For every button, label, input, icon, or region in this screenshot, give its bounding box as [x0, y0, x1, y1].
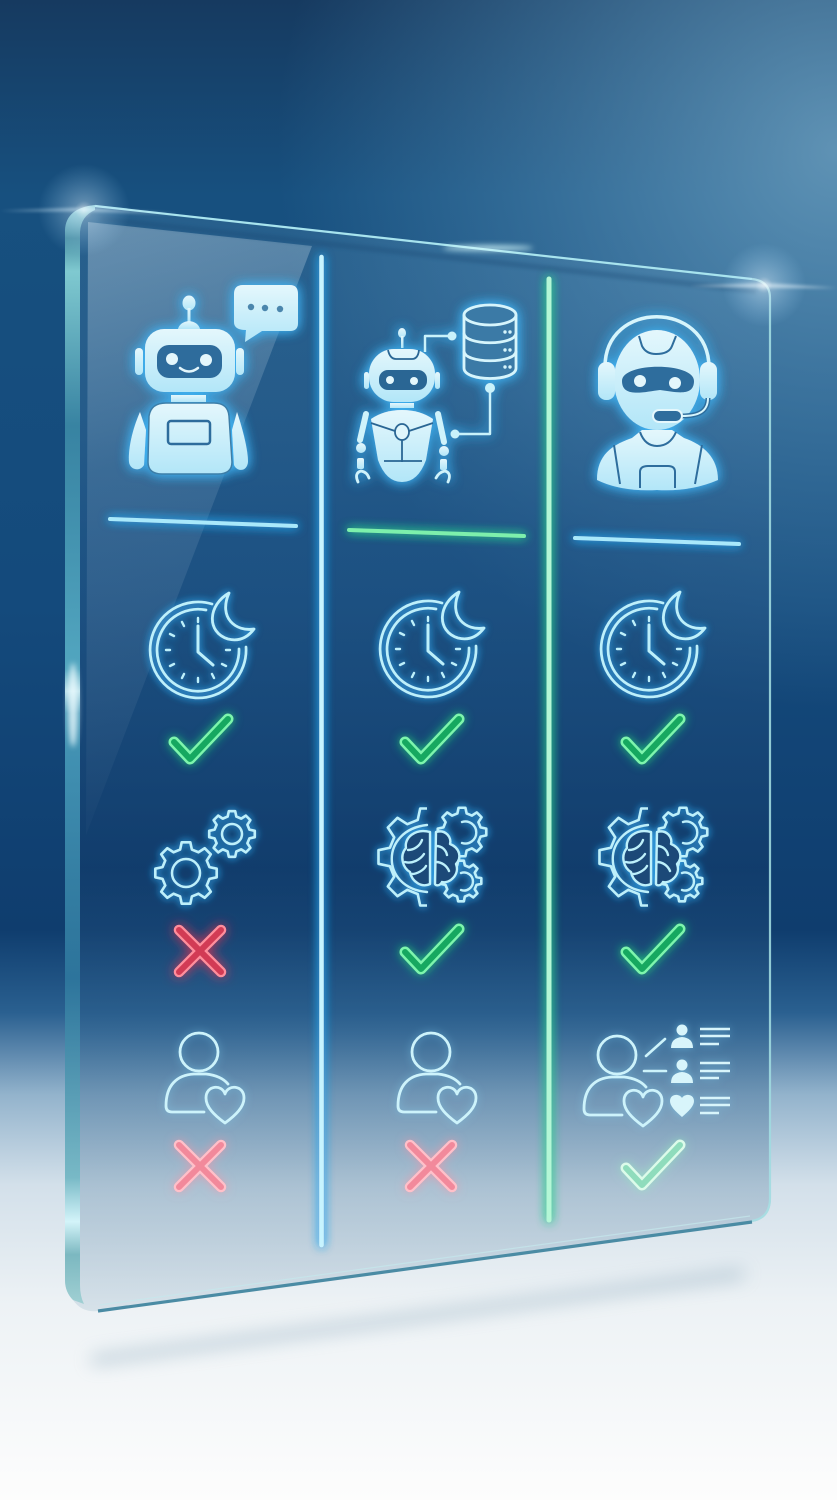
icon: red cross, row 2 column 1 — [179, 930, 221, 972]
floating panel shadow — [95, 1274, 740, 1360]
header divider: column 2 — [349, 530, 524, 536]
icon: clock and moon, column 3 — [601, 592, 705, 697]
icon: check, row 2 column 3 — [626, 929, 680, 969]
header divider: column 1 — [110, 519, 296, 526]
icon: person with heart, column 2 — [398, 1033, 476, 1123]
glass panel — [65, 205, 771, 1311]
icon: brain and gears, column 3 — [599, 808, 707, 906]
icon: check, column 2 — [405, 719, 459, 759]
glass right edge — [752, 279, 770, 1221]
glass bottom highlight — [100, 1216, 750, 1305]
icon: check, column 3 — [626, 719, 680, 759]
glass top edge — [95, 206, 752, 279]
icon: pale cross, row 3 column 1 — [179, 1145, 221, 1187]
glass shine reflection — [86, 222, 312, 835]
icon: pale check, row 3 column 3 — [626, 1145, 680, 1185]
header divider: column 3 — [575, 538, 739, 544]
icon: gears, column 1 — [155, 811, 255, 904]
glass bottom edge — [98, 1222, 752, 1311]
lens flare: top left — [0, 164, 180, 256]
column divider: blue — [319, 257, 324, 1245]
row 1: check marks — [174, 719, 680, 759]
column divider: green — [546, 279, 552, 1220]
icon: chatbot robot with speech bubble — [129, 285, 298, 474]
row 1: overnight availability icons — [150, 592, 705, 698]
lens flare: top right — [690, 243, 837, 327]
icon: check, column 1 — [174, 719, 228, 759]
icon: clock and moon, column 2 — [380, 592, 484, 697]
icon: pale cross, row 3 column 2 — [410, 1145, 452, 1187]
icon: support robot with headset — [597, 317, 718, 490]
icon: person with heart and profile lists, column 3 — [584, 1024, 730, 1126]
icon: robot connected to database — [356, 305, 516, 482]
edge glints — [68, 246, 533, 747]
icon: person with heart, column 1 — [166, 1033, 244, 1123]
icon: clock and moon, column 1 — [150, 593, 254, 698]
icon: check, row 2 column 2 — [405, 929, 459, 969]
glass left edge bevel — [65, 205, 95, 1304]
icon: brain and gears, column 2 — [378, 808, 486, 906]
glass top inner edge — [100, 219, 756, 291]
